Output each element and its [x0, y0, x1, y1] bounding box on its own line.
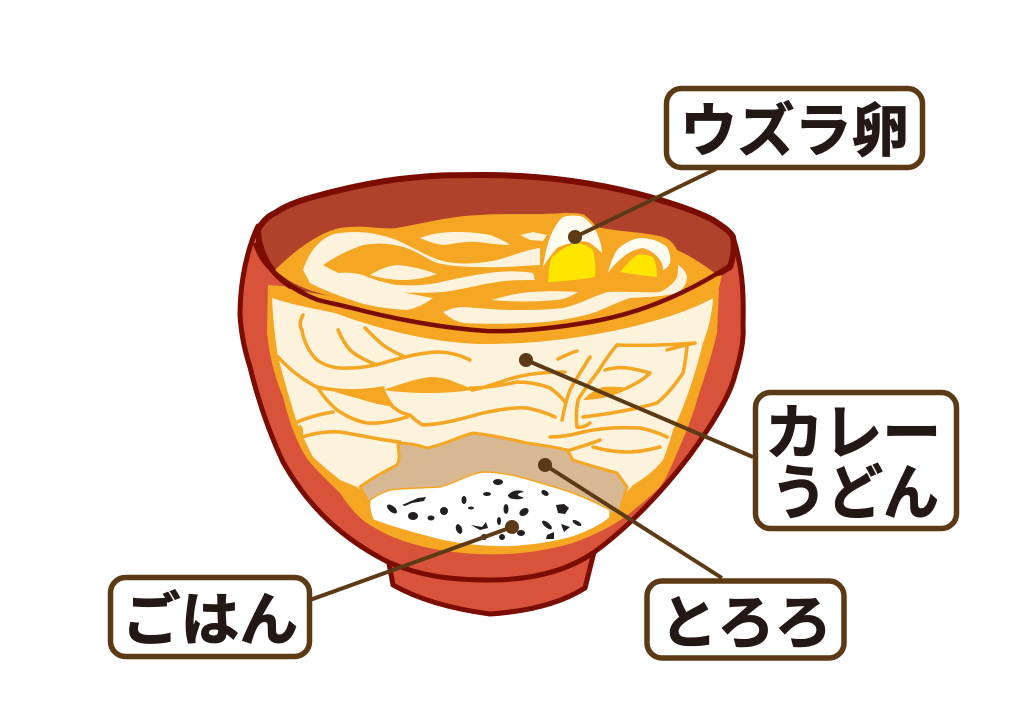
rim interior [258, 175, 734, 330]
udon noodles in soup [303, 232, 687, 324]
bowl foot [388, 552, 594, 614]
cross-section noodles cream fill [272, 298, 713, 500]
bowl body [240, 226, 743, 580]
egg one [543, 216, 602, 282]
rim front line [255, 243, 731, 331]
label: quail egg: ウズラ卵 [680, 99, 909, 164]
tororo grated yam [360, 433, 627, 520]
label: curry udon: カレー [765, 400, 941, 467]
label: curry udon [756, 392, 956, 528]
orange noodle gaps [335, 377, 630, 407]
quail egg halves [543, 216, 670, 282]
soup and cross-section orange [267, 270, 719, 554]
bowl [240, 175, 743, 614]
label: tororo: とろろ [660, 591, 832, 656]
leader line: rice [310, 520, 519, 600]
egg two [608, 238, 670, 277]
soup surface [275, 213, 720, 328]
leader line: curry udon [519, 353, 753, 457]
leader line: tororo [538, 458, 722, 578]
rice [370, 472, 610, 547]
leader line: quail egg [568, 169, 716, 244]
black sesame [385, 479, 582, 540]
orange band below rim [268, 275, 722, 342]
label: rice: ごはん [122, 588, 298, 653]
label: curry udon: うどん [771, 460, 939, 527]
noodle strands [278, 315, 695, 452]
